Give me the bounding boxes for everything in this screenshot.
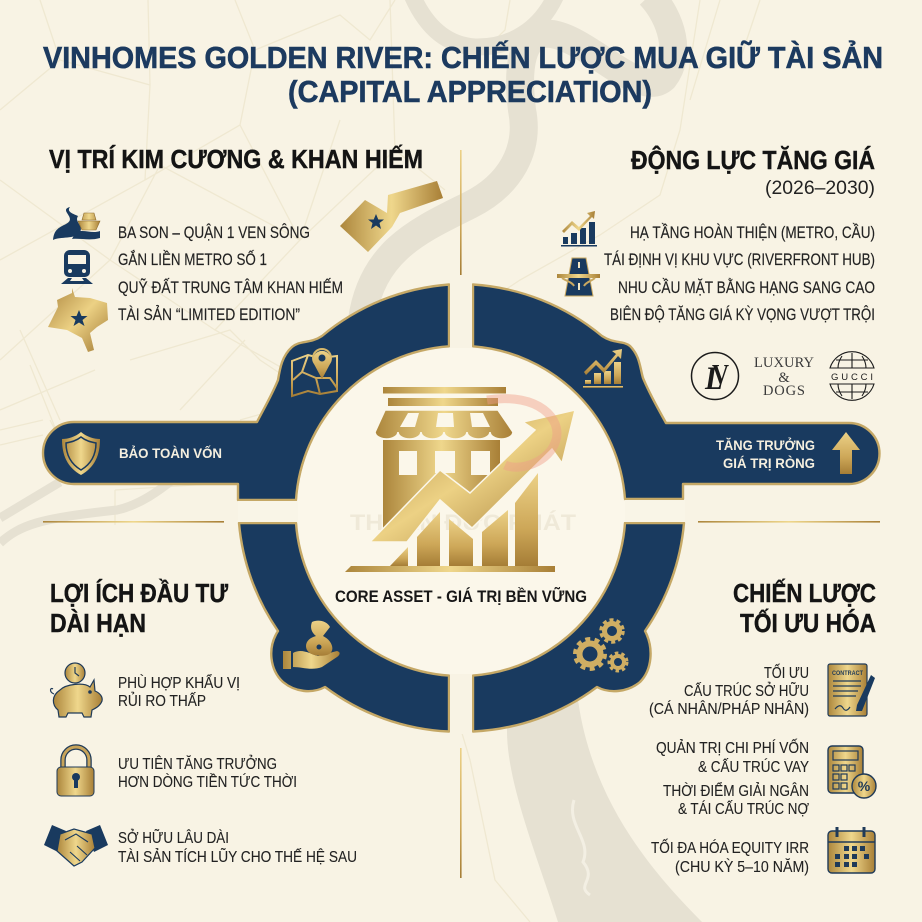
panel: lợi ích đầu tư dài hạn: DÀI HẠN (50, 608, 146, 638)
panel: chiến lược tối ưu hóa: TỐI ƯU HÓA (740, 608, 876, 638)
panel: chiến lược tối ưu hóa: CHIẾN LƯỢC (733, 578, 876, 608)
logo: gucci globe: GUCCI (831, 372, 873, 383)
panel: chiến lược tối ưu hóa: QUẢN TRỊ CHI PHÍ VỐN (656, 739, 809, 757)
panel: chiến lược tối ưu hóa: & TÁI CẤU TRÚC NỢ (678, 801, 809, 818)
panel: vị trí kim cương: QUỸ ĐẤT TRUNG TÂM KHAN HIẾM (118, 278, 343, 297)
icon: piggy bank with clock (50, 663, 102, 717)
icon: train (61, 250, 93, 284)
icon: calculator with percent (828, 746, 876, 798)
panel: chiến lược tối ưu hóa: & CẤU TRÚC VAY (698, 759, 809, 776)
panel: vị trí kim cương: BA SON – QUẬN 1 VEN SÔNG (118, 223, 310, 242)
panel: vị trí kim cương (48, 144, 443, 352)
logo: LV (692, 352, 738, 400)
logo: LV: L (704, 361, 723, 397)
panel: lợi ích đầu tư dài hạn: SỞ HỮU LÂU DÀI (118, 829, 229, 847)
panel: chiến lược tối ưu hóa: (CÁ NHÂN/PHÁP NHÂN) (649, 701, 809, 718)
pill: tăng trưởng giá trị ròng: TĂNG TRƯỞNG (716, 436, 815, 453)
pill: tăng trưởng giá trị ròng: GIÁ TRỊ RÒNG (723, 454, 815, 471)
title: VINHOMES GOLDEN RIVER: CHIẾN LƯỢC MUA GIỮ TÀI SẢN (43, 39, 883, 75)
logo: luxury and dogs (754, 355, 815, 399)
central icon: shop with rising arrow (345, 387, 575, 572)
pill: bảo toàn vốn (62, 432, 222, 475)
icon: highway bridge (557, 258, 600, 296)
icon: gears (575, 620, 627, 671)
logo: luxury and dogs: & (778, 370, 790, 386)
pill: bảo toàn vốn: BẢO TOÀN VỐN (119, 444, 222, 461)
ring segment: top right with pill (473, 284, 879, 499)
panel: chiến lược tối ưu hóa: CẤU TRÚC SỞ HỮU (684, 682, 809, 700)
panel: chiến lược tối ưu hóa (649, 578, 876, 876)
logo: luxury and dogs: LUXURY (754, 355, 815, 371)
panel: lợi ích đầu tư dài hạn: ƯU TIÊN TĂNG TRƯỞNG (118, 755, 277, 773)
title (43, 39, 883, 109)
logo: luxury and dogs: DOGS (763, 383, 805, 399)
panel: vị trí kim cương: TÀI SẢN “LIMITED EDITION” (118, 305, 300, 324)
panel: vị trí kim cương: GẮN LIỀN METRO SỐ 1 (118, 249, 267, 269)
ring segment: bottom right (473, 523, 684, 732)
icon: up arrow (832, 432, 860, 474)
watermark text: THUẬN ĐỨC PHÁT (350, 510, 577, 535)
icon: calendar (828, 827, 875, 873)
central ring (43, 284, 879, 732)
icon: district map with star (48, 288, 108, 352)
ring segment: bottom left (239, 523, 449, 732)
center caption: CORE ASSET - GIÁ TRỊ BỀN VỮNG (335, 586, 587, 606)
icon: map with pin (292, 349, 337, 396)
panel: lợi ích đầu tư dài hạn (44, 578, 357, 866)
icon: shield (62, 432, 100, 475)
title: (CAPITAL APPRECIATION) (288, 74, 652, 109)
icon: contract and pen (828, 664, 875, 716)
logo: gucci globe (830, 352, 874, 400)
pill: tăng trưởng giá trị ròng (716, 432, 860, 474)
icon: handshake (44, 825, 108, 866)
panel: lợi ích đầu tư dài hạn: RỦI RO THẤP (118, 692, 206, 710)
icon: bar chart with arrow (561, 211, 597, 246)
panel: chiến lược tối ưu hóa: (CHU KỲ 5–10 NĂM) (675, 859, 809, 876)
panel: lợi ích đầu tư dài hạn: HƠN DÒNG TIỀN TỨC THỜI (118, 774, 297, 791)
panel: lợi ích đầu tư dài hạn: TÀI SẢN TÍCH LŨY CHO THẾ HỆ SAU (118, 849, 357, 866)
panel: vị trí kim cương: VỊ TRÍ KIM CƯƠNG & KHAN HIẾM (49, 144, 423, 174)
icon: growth chart in ring (583, 349, 623, 388)
panel: chiến lược tối ưu hóa: THỜI ĐIỂM GIẢI NGÂN (663, 782, 809, 800)
logo: LV: V (712, 360, 729, 391)
icon: hand holding money bag (283, 621, 340, 669)
ring segment: top left with pill (43, 284, 449, 500)
icon: river and ship (53, 207, 100, 240)
icon: golden plot on river (340, 181, 443, 252)
icon: contract and pen: CONTRACT (832, 671, 863, 677)
panel: động lực tăng giá: ĐỘNG LỰC TĂNG GIÁ (631, 145, 875, 175)
panel: động lực tăng giá: (2026–2030) (765, 178, 875, 199)
panel: lợi ích đầu tư dài hạn: PHÙ HỢP KHẨU VỊ (118, 674, 240, 692)
panel: chiến lược tối ưu hóa: TỐI ĐA HÓA EQUITY IRR (651, 839, 809, 857)
panel: lợi ích đầu tư dài hạn: LỢI ÍCH ĐẦU TƯ (50, 578, 228, 608)
icon: calculator with percent: % (858, 778, 871, 794)
panel: chiến lược tối ưu hóa: TỐI ƯU (764, 664, 809, 682)
icon: padlock (57, 747, 94, 796)
panel: động lực tăng giá (557, 145, 875, 400)
